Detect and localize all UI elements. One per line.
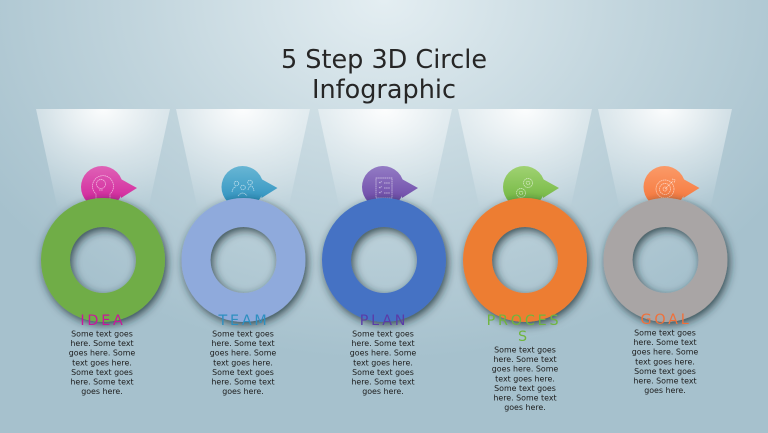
- heading: PROCESS: PROCES: [487, 313, 561, 329]
- light beams: [36, 109, 732, 215]
- text block: goes here.: [362, 387, 404, 396]
- step 1: idea: [41, 166, 165, 396]
- ring: blue: [322, 198, 446, 322]
- step 5: goal: [604, 166, 728, 395]
- text block: Some text goes: [212, 368, 274, 377]
- icon: green location bubble with gears: [503, 166, 559, 208]
- ring: periwinkle: [181, 198, 306, 322]
- step 3: plan: [322, 166, 446, 396]
- step 4: process: [463, 166, 587, 412]
- heading: GOAL: GOAL: [640, 312, 692, 328]
- text block: text goes here.: [495, 374, 555, 383]
- text block: here. Some text: [70, 339, 134, 348]
- text block: goes here. Some: [210, 349, 276, 358]
- text block: goes here. Some: [350, 349, 416, 358]
- icon: orange location bubble with target: [644, 166, 700, 208]
- title: Infographic: [312, 75, 456, 105]
- title: 5 Step 3D Circle: [281, 45, 487, 75]
- text block: goes here.: [81, 387, 123, 396]
- text block: here. Some text: [493, 394, 557, 402]
- text block: text goes here.: [353, 358, 413, 367]
- text block: goes here. Some: [492, 365, 558, 374]
- text block: here. Some text: [633, 338, 697, 347]
- text block: here. Some text: [70, 378, 134, 386]
- text block: goes here.: [644, 386, 686, 395]
- step 2: team: [181, 166, 306, 396]
- ring: orange: [463, 198, 587, 322]
- heading: IDEA: IDEA: [80, 313, 126, 329]
- text block: text goes here.: [213, 358, 273, 367]
- text block: goes here. Some: [69, 349, 135, 358]
- text block: here. Some text: [211, 378, 275, 386]
- text block: here. Some text: [633, 376, 697, 386]
- text block: text goes here.: [635, 357, 695, 366]
- text block: Some text goes: [352, 368, 414, 377]
- text block: Some text goes: [634, 367, 696, 376]
- text block: Some text goes: [494, 384, 556, 393]
- heading: PLAN: PLAN: [360, 313, 408, 329]
- text block: goes here. Some: [632, 348, 698, 357]
- text block: here. Some text: [351, 339, 415, 348]
- heading: PROCESS: S: [518, 329, 530, 345]
- text block: Some text goes: [212, 330, 274, 338]
- ring: grey: [604, 198, 728, 322]
- text block: goes here.: [504, 403, 546, 412]
- text block: Some text goes: [71, 368, 133, 377]
- text block: text goes here.: [72, 358, 132, 367]
- text block: Some text goes: [634, 328, 696, 338]
- text block: Some text goes: [494, 346, 556, 354]
- icon: blue location bubble with people: [222, 166, 278, 208]
- text block: Some text goes: [71, 330, 133, 338]
- text block: Some text goes: [352, 330, 414, 338]
- ring: green: [41, 198, 165, 322]
- text block: here. Some text: [493, 355, 557, 364]
- icon: pink location bubble with head and lightbulb: [81, 166, 137, 208]
- text block: here. Some text: [351, 378, 415, 386]
- text block: goes here.: [222, 387, 264, 396]
- text block: here. Some text: [211, 339, 275, 348]
- heading: TEAM: TEAM: [217, 313, 270, 329]
- icon: purple location bubble with checklist: [362, 166, 418, 208]
